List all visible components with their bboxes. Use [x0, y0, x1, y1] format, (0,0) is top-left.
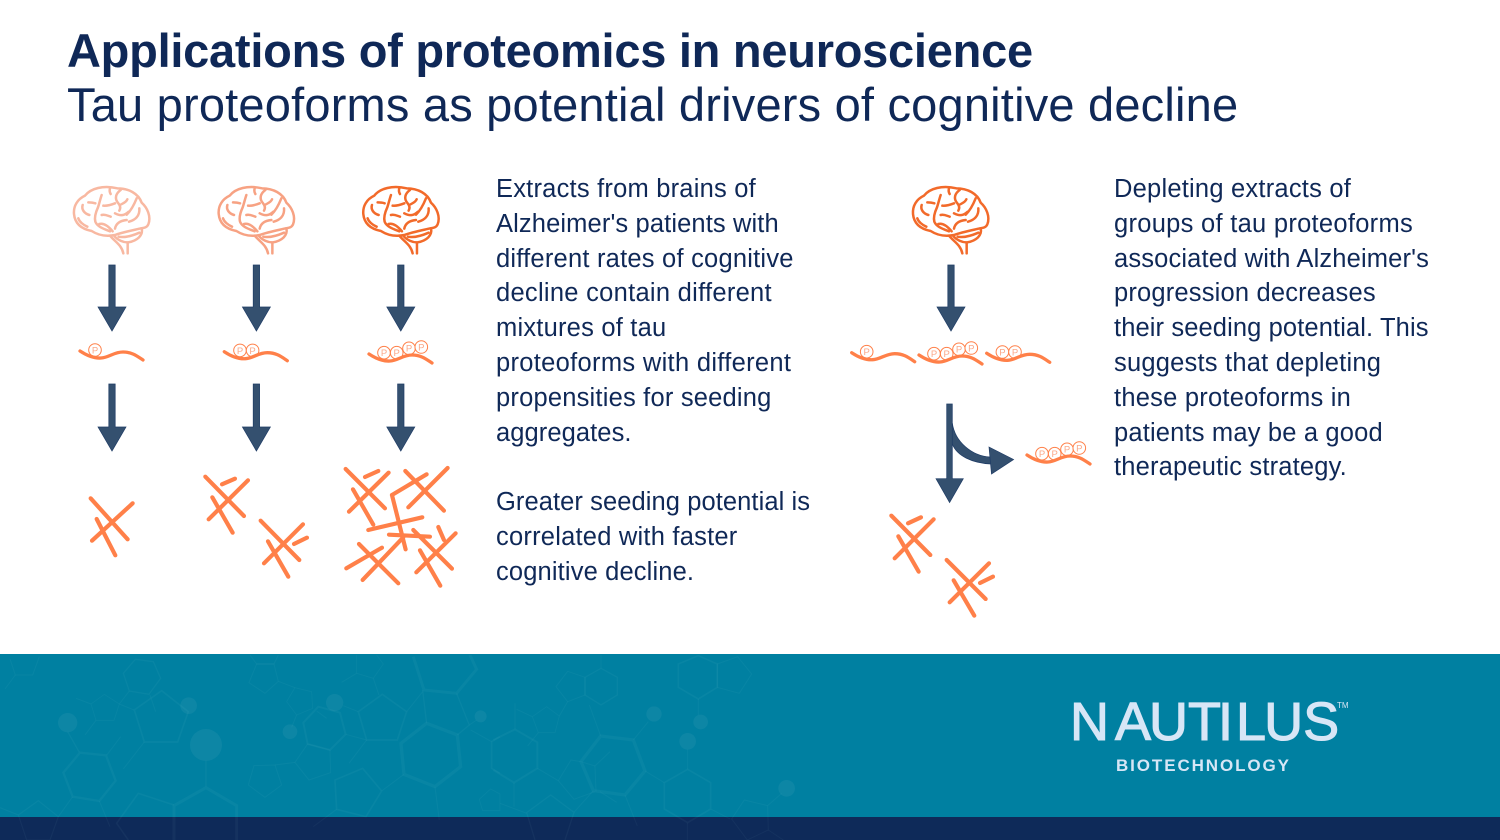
proteoform: four phosphates: P [406, 344, 412, 355]
text block: seeding correlation [496, 488, 810, 586]
subtitle: Tau proteoforms as potential drivers of cognitive decline [67, 78, 1238, 131]
proteoform: four phosphates [919, 342, 982, 364]
background molecule pattern [15, 664, 795, 830]
arrow: proteoform to aggregates [242, 384, 270, 451]
logo wordmark: NAUTILUS [1070, 692, 1339, 752]
arrow: brain to proteoform [387, 265, 415, 331]
arrow: proteoform to aggregate [98, 384, 126, 451]
trademark: TM [1337, 700, 1349, 710]
proteoform: two phosphates [987, 346, 1050, 362]
proteoform: one phosphate [80, 344, 143, 360]
arrow: brain to proteoform [98, 265, 126, 331]
arrow: brain to proteoform [242, 265, 270, 331]
proteoform: two phosphates [224, 344, 287, 361]
panel: depletion experiment [852, 187, 1090, 616]
text block: extracts explanation: Alzheimer's patients with [496, 210, 779, 238]
aggregates: dense tangle [346, 468, 456, 586]
text block: seeding correlation: correlated with faster [496, 523, 738, 551]
text block: depletion explanation: their seeding potential. This [1114, 314, 1429, 342]
text block: depletion explanation: associated with Alzheimer's [1114, 245, 1429, 273]
panel: medium decline column [205, 187, 307, 577]
logo tagline: BIOTECHNOLOGY [1116, 756, 1291, 775]
proteoform: one phosphate: P [92, 345, 98, 356]
text block: depletion explanation [1114, 175, 1429, 481]
proteoform: two phosphates: P [999, 347, 1006, 358]
icon: medium brain [219, 187, 294, 253]
proteoform: four phosphates: P [931, 349, 937, 360]
text block: extracts explanation: decline contain different [496, 279, 772, 307]
text block: depletion explanation: patients may be a good [1114, 419, 1383, 447]
proteoform mixture [852, 342, 1050, 364]
icon: source brain [913, 187, 988, 253]
icon: faint brain [74, 187, 149, 253]
proteoform: depleted four phosphates: P [1076, 443, 1082, 454]
proteoform: two phosphates: P [249, 346, 256, 357]
text block: depletion explanation: Depleting extracts of [1114, 175, 1351, 203]
text block: extracts explanation: Extracts from brains of [496, 175, 756, 203]
logo: Nautilus Biotechnology [1070, 692, 1349, 775]
navy footer strip [0, 817, 1500, 840]
text block: depletion explanation: suggests that depleting [1114, 349, 1381, 377]
text block: seeding correlation: cognitive decline. [496, 558, 694, 586]
proteoform: four phosphates: P [381, 348, 387, 359]
text block: extracts explanation: aggregates. [496, 419, 632, 447]
proteoform: four phosphates: P [968, 343, 974, 354]
illustration layer [0, 186, 1500, 840]
aggregates: reduced seeds [891, 516, 993, 616]
proteoform: depleted four phosphates: P [1039, 449, 1045, 460]
text block: depletion explanation: groups of tau proteoforms [1114, 210, 1413, 238]
proteoform: two phosphates: P [237, 346, 243, 357]
proteoform: four phosphates [369, 341, 432, 363]
proteoform: four phosphates: P [944, 349, 950, 360]
proteoform: four phosphates: P [418, 342, 424, 353]
text block: depletion explanation: progression decreases [1114, 279, 1376, 307]
panel: slow decline column [74, 187, 149, 555]
aggregate: single seed [91, 498, 133, 555]
text block: seeding correlation: Greater seeding potential is [496, 488, 810, 516]
arrow: proteoform to aggregates [387, 384, 415, 451]
aggregates: two seeds [205, 477, 307, 577]
proteoform: one phosphate: P [864, 347, 870, 358]
proteoform: depleted four phosphates: P [1052, 449, 1058, 460]
proteoform: two phosphates: P [1012, 347, 1018, 358]
arrow: split depletion arrow [936, 404, 1014, 502]
proteoform: depleted four phosphates: P [1064, 445, 1070, 456]
panel: fast decline column [346, 187, 456, 586]
proteoform: four phosphates: P [956, 345, 962, 356]
text block: extracts explanation: different rates of cognitive [496, 245, 794, 273]
text block: extracts explanation [496, 175, 794, 447]
arrow: brain to proteoform mixture [937, 265, 965, 331]
proteoform: one phosphate [852, 345, 915, 362]
title: Applications of proteomics in neuroscience [67, 24, 1033, 77]
text block: extracts explanation: propensities for seeding [496, 384, 772, 412]
text block: depletion explanation: these proteoforms in [1114, 384, 1351, 412]
text block: extracts explanation: proteoforms with different [496, 349, 791, 377]
proteoform: four phosphates: P [394, 348, 400, 359]
text block: extracts explanation: mixtures of tau [496, 314, 666, 342]
proteoform: depleted four phosphates [1027, 442, 1090, 464]
text block: depletion explanation: therapeutic strategy. [1114, 453, 1347, 481]
icon: strong brain [363, 187, 439, 253]
teal footer band [0, 654, 1500, 817]
